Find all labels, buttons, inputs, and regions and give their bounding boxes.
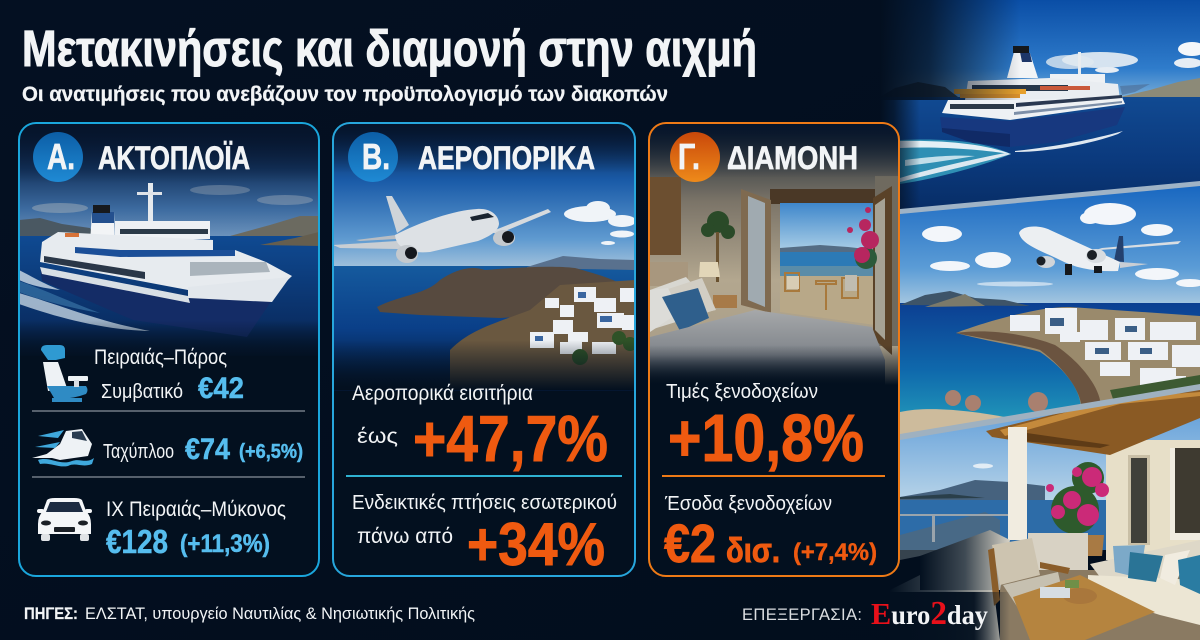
photo: aeroplane over island village <box>900 184 1200 438</box>
badge Γ <box>670 132 720 182</box>
hotel revenue: Έσοδα ξενοδοχείων <box>664 493 832 515</box>
title: Μετακινήσεις και διαμονή στην αιχμή <box>22 20 757 77</box>
ferry, panel A <box>40 183 292 337</box>
private car price <box>106 523 270 560</box>
wake <box>900 131 1123 184</box>
fade behind logo <box>890 592 1010 640</box>
hotel revenue: δισ. <box>726 532 780 570</box>
fade left edge <box>880 0 1020 220</box>
strip between aeroplane and terrace photos <box>900 384 1200 440</box>
air tickets increase: Αεροπορικά εισιτήρια <box>352 382 533 405</box>
badge Γ: Γ. <box>678 136 700 177</box>
hotel prices increase: Τιμές ξενοδοχείων <box>666 381 818 403</box>
scene: ferry in panel A <box>19 123 319 365</box>
coffee table <box>1013 575 1155 640</box>
air tickets increase: +47,7% <box>413 402 608 475</box>
credit and logo <box>742 595 988 632</box>
scene: aeroplane over island <box>333 123 637 391</box>
hotel revenue <box>664 493 877 574</box>
domestic flights increase: +34% <box>467 511 605 578</box>
aeroplane, panel B <box>333 196 551 263</box>
heading A: ΑΚΤΟΠΛΟΪΑ <box>98 140 250 176</box>
credit and logo: ΕΠΕΞΕΡΓΑΣΙΑ: <box>742 606 862 624</box>
hotel prices increase: +10,8% <box>668 401 864 476</box>
sources: ΕΛΣΤΑΤ, υπουργείο Ναυτιλίας & Νησιωτικής Πολιτικής <box>85 604 475 623</box>
subtitle: Οι ανατιμήσεις που ανεβάζουν τον προϋπολογισμό των διακοπών <box>22 83 668 106</box>
conventional ferry price: €42 <box>198 372 244 405</box>
domestic flights increase <box>352 492 617 578</box>
sources: ΠΗΓΕΣ: <box>24 604 78 623</box>
badge A <box>33 132 83 182</box>
route: Piraeus to Mykonos: ΙΧ Πειραιάς–Μύκονος <box>106 498 286 521</box>
heading Γ: ΔΙΑΜΟΝΗ <box>727 140 858 176</box>
air tickets increase <box>352 382 608 475</box>
armchair <box>988 538 1070 608</box>
aeroplane, right <box>1019 227 1181 275</box>
scene: hotel room <box>649 123 899 385</box>
badge B <box>348 132 398 182</box>
hotel prices increase <box>666 381 864 476</box>
panel: coastal shipping <box>19 123 319 576</box>
fast ferry price: Ταχύπλοο <box>103 441 174 463</box>
icon: seat <box>41 345 88 402</box>
photo: terrace with sea view <box>890 387 1200 640</box>
fast ferry price: €74 <box>185 433 230 466</box>
conventional ferry price: Συμβατικό <box>101 381 183 403</box>
photo: ferry at sea <box>880 0 1200 220</box>
strip between ferry and aeroplane photos <box>900 181 1200 214</box>
outdoor sofa <box>1088 540 1200 625</box>
hotel revenue: €2 <box>664 514 716 574</box>
panel: accommodation <box>649 123 899 576</box>
route: Piraeus to Paros: Πειραιάς–Πάρος <box>94 346 227 369</box>
private car price: (+11,3%) <box>180 530 270 558</box>
fast ferry price: (+6,5%) <box>239 441 303 463</box>
credit and logo: Euro2day <box>871 595 988 632</box>
icon: speedboat <box>32 429 94 466</box>
private car price: €128 <box>106 523 168 560</box>
domestic flights increase: Ενδεικτικές πτήσεις εσωτερικού <box>352 492 617 514</box>
panel: air travel <box>333 123 637 578</box>
domestic flights increase: πάνω από <box>357 525 453 548</box>
hotel revenue: (+7,4%) <box>793 539 877 566</box>
fast ferry price <box>103 433 303 466</box>
conventional ferry price <box>101 372 244 405</box>
icon: car <box>37 498 92 541</box>
ferry, top right <box>940 46 1125 147</box>
badge A: Α. <box>47 136 75 177</box>
heading B: ΑΕΡΟΠΟΡΙΚΑ <box>418 140 595 176</box>
badge B: Β. <box>362 136 390 177</box>
air tickets increase: έως <box>357 425 398 448</box>
